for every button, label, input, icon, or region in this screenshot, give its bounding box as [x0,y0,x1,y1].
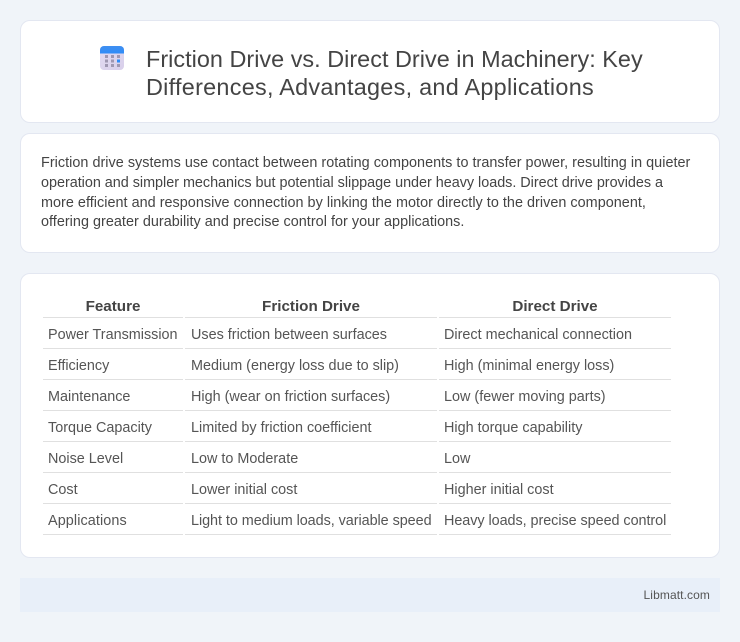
comparison table: High (wear on friction surfaces) [191,389,390,405]
title: Differences, Advantages, and Applications [146,74,594,100]
comparison table [43,298,671,535]
comparison table: Uses friction between surfaces [191,327,387,343]
intro paragraph: Friction drive systems use contact between rotating components to transfer power, resulting in quieter [41,155,690,171]
icon: calendar [100,46,124,70]
comparison table: Applications [48,513,127,529]
title: Friction Drive vs. Direct Drive in Machinery: Key [146,46,643,72]
comparison table: High (minimal energy loss) [444,358,614,374]
footer bar [20,578,720,612]
panel: intro text card [20,133,720,253]
comparison table: Medium (energy loss due to slip) [191,358,399,374]
comparison table: Cost [48,482,78,498]
comparison table: Limited by friction coefficient [191,420,372,436]
comparison table: Low (fewer moving parts) [444,389,606,405]
comparison table: Noise Level [48,451,123,467]
comparison table: Direct mechanical connection [444,327,632,343]
comparison table: High torque capability [444,420,582,436]
intro paragraph: offering greater durability and precise control for your applications. [41,214,464,230]
comparison table: Lower initial cost [191,482,297,498]
title [146,46,643,100]
header: Feature: Feature [86,298,140,315]
comparison table: Low [444,451,470,467]
comparison table: Higher initial cost [444,482,554,498]
footer credit: Libmatt.com [644,588,710,602]
header: Friction Drive: Friction Drive [262,298,360,315]
comparison table: Low to Moderate [191,451,298,467]
comparison table: Light to medium loads, variable speed [191,513,432,529]
comparison table: Heavy loads, precise speed control [444,513,666,529]
intro paragraph: more efficient and responsive connection by linking the motor directly to the driven component, [41,195,646,211]
intro paragraph: operation and simpler mechanics but potential slippage under heavy loads. Direct drive provides a [41,175,663,191]
intro paragraph [41,155,690,230]
panel: comparison table card [20,273,720,558]
panel: title card [20,20,720,123]
header: Direct Drive: Direct Drive [512,298,598,315]
comparison table: Maintenance [48,389,130,405]
comparison table: Power Transmission [48,327,178,343]
comparison table: Torque Capacity [48,420,152,436]
comparison table: Efficiency [48,358,109,374]
